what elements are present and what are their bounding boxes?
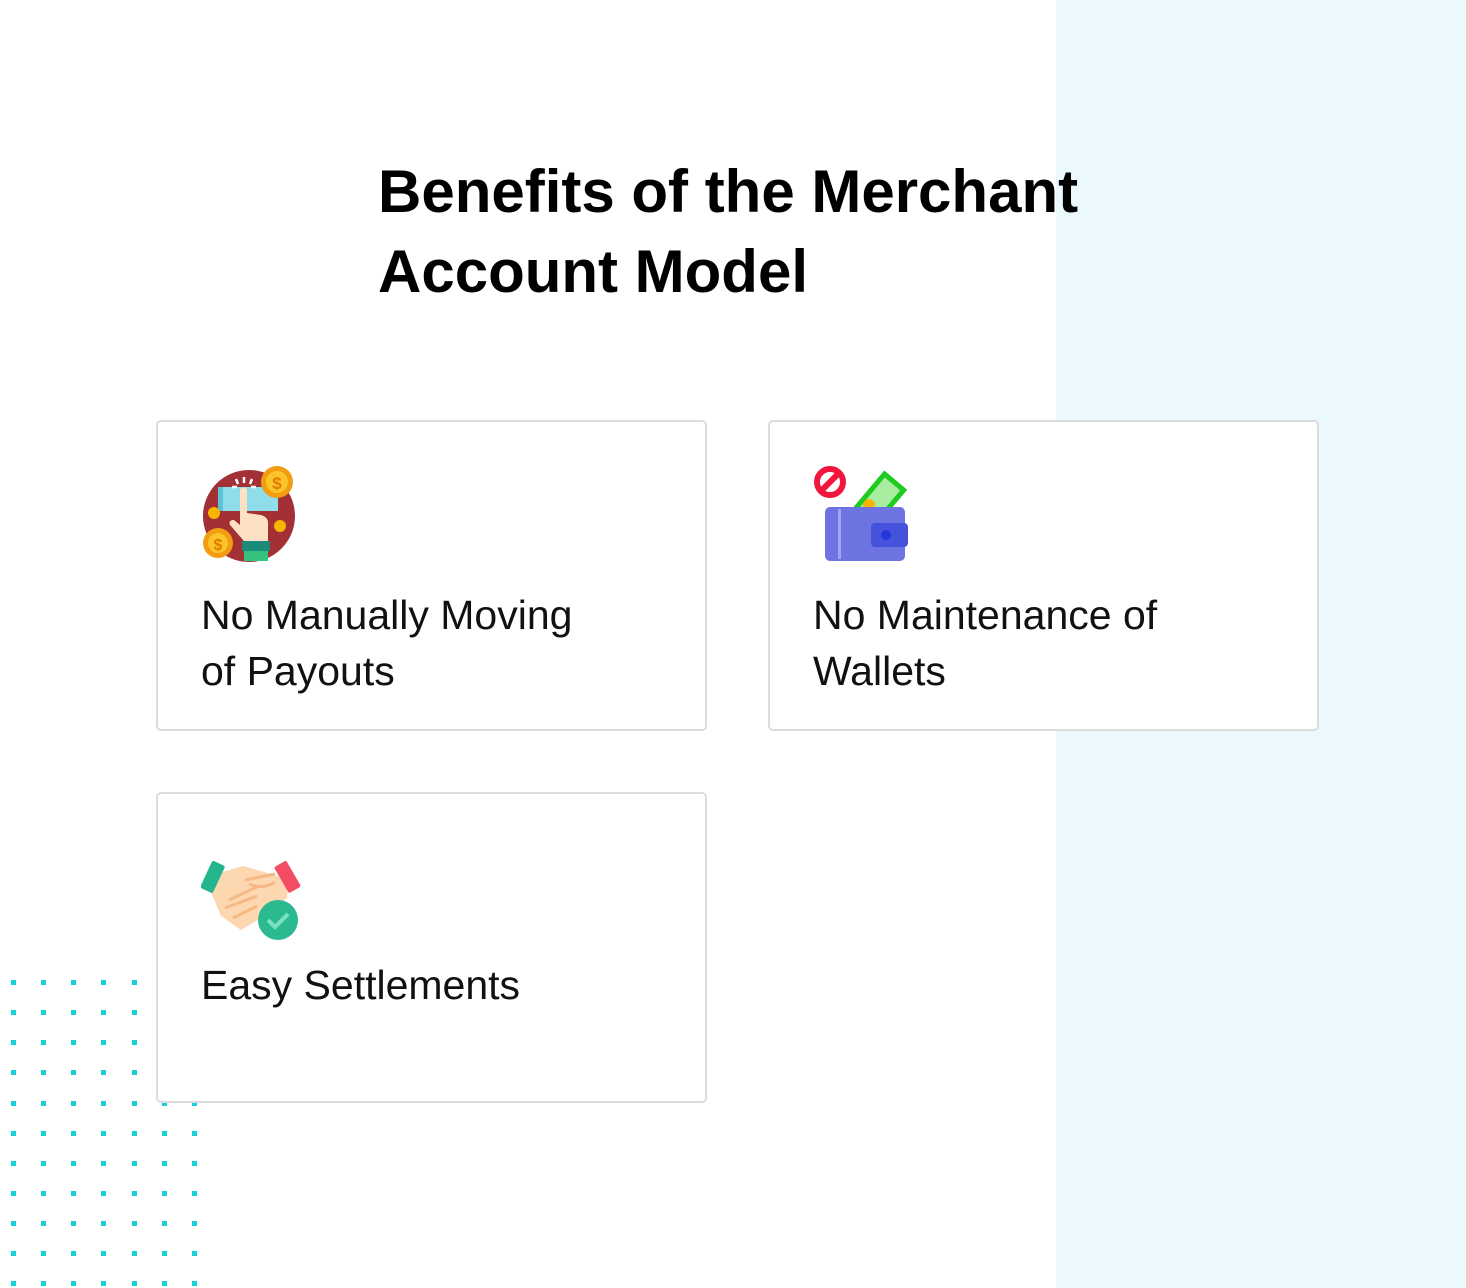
label: No Maintenance of xyxy=(813,592,1157,638)
icon: hand tapping payout: $ xyxy=(272,474,282,493)
card: no maintenance of wallets xyxy=(768,420,1319,731)
label: Wallets xyxy=(813,648,946,694)
card: no manually moving of payouts xyxy=(156,420,707,731)
background panel xyxy=(1056,0,1466,1288)
label xyxy=(813,592,1158,694)
card: easy settlements xyxy=(156,792,707,1103)
label: of Payouts xyxy=(201,648,395,694)
title xyxy=(378,158,1078,305)
dot pattern xyxy=(11,980,197,1286)
icon: hand tapping payout: $ xyxy=(214,537,223,554)
title: Account Model xyxy=(378,238,808,305)
label xyxy=(201,592,572,694)
label: No Manually Moving xyxy=(201,592,572,638)
title: Benefits of the Merchant xyxy=(378,158,1078,225)
label: Easy Settlements xyxy=(201,962,520,1008)
icon: hand tapping payout xyxy=(203,466,295,562)
icon: wallet with no sign xyxy=(814,466,908,561)
icon: handshake with check xyxy=(201,860,300,940)
